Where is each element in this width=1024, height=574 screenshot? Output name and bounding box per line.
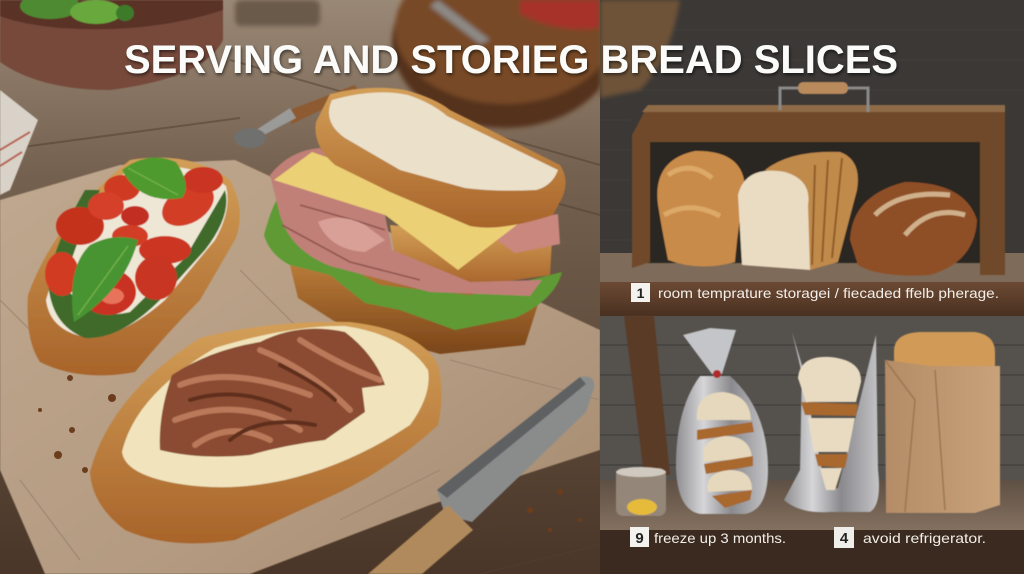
spoon xyxy=(234,85,358,148)
cheese xyxy=(274,152,518,270)
melted cheese xyxy=(122,326,429,487)
left side xyxy=(632,135,650,268)
salad bowl xyxy=(0,0,223,90)
bread crust xyxy=(90,322,442,543)
bottom slice xyxy=(290,265,540,354)
number badge 4: 4 xyxy=(840,530,849,547)
cucumber xyxy=(48,190,226,338)
sliced loaf xyxy=(765,152,858,270)
ham right xyxy=(480,214,560,253)
bread box xyxy=(632,82,1005,276)
cutting board xyxy=(235,0,618,128)
blade xyxy=(437,376,594,522)
brick wall xyxy=(600,0,1024,574)
storage tip 1 xyxy=(631,283,999,302)
top slice crust xyxy=(315,88,566,228)
lid handle xyxy=(780,88,868,112)
ham left xyxy=(270,148,542,296)
crumbs xyxy=(38,375,582,532)
tomato basil bread xyxy=(28,158,240,375)
round-top loaf xyxy=(657,151,745,267)
napkin xyxy=(0,90,38,195)
panel: storage scene xyxy=(600,0,1024,574)
shelf front xyxy=(600,282,1024,316)
bread slices xyxy=(798,357,861,402)
number badge 9 xyxy=(630,527,649,547)
shelf front xyxy=(600,530,1024,574)
loaf xyxy=(894,332,995,368)
pulled pork xyxy=(160,329,385,457)
white spread xyxy=(46,166,228,338)
panel: serving scene xyxy=(0,0,618,574)
lid xyxy=(632,105,1005,142)
bread slices xyxy=(697,392,751,420)
rustic boule xyxy=(850,182,977,276)
parchment paper xyxy=(0,160,600,574)
kraft bag xyxy=(885,360,1000,513)
bag top xyxy=(683,328,736,374)
top left board edge xyxy=(600,0,680,98)
storage tip 4 xyxy=(834,527,986,548)
lettuce xyxy=(264,195,562,330)
wooden table xyxy=(0,0,600,574)
handle xyxy=(368,505,473,574)
top slice crumb xyxy=(329,92,558,191)
tip text: freeze up 3 months. xyxy=(654,530,786,546)
title: SERVING AND STORIEG BREAD SLICES xyxy=(124,38,898,82)
foil wrap xyxy=(784,332,879,512)
bread knife xyxy=(368,376,594,574)
pulled pork bread xyxy=(90,322,442,543)
lower brick wall xyxy=(600,316,1024,486)
shelf post xyxy=(624,316,670,475)
bag body xyxy=(676,376,768,514)
small butter jar xyxy=(616,467,666,516)
shelf top xyxy=(600,480,1024,530)
ham and cheese sandwich xyxy=(264,88,566,354)
number badge 9: 9 xyxy=(635,530,644,547)
lower shelf xyxy=(600,480,1024,574)
tomatoes xyxy=(45,167,223,315)
number badge 4 xyxy=(834,527,854,548)
shelf top xyxy=(600,253,1024,285)
storage tip 3 xyxy=(630,527,786,547)
basil leaves xyxy=(122,158,186,199)
paper bag with loaf xyxy=(885,332,1000,513)
foil wrapped slices xyxy=(784,332,879,512)
foil tied bag xyxy=(676,328,768,514)
number badge 1 xyxy=(631,283,650,302)
tip text: room temprature storagei / fiecaded ffelb pherage. xyxy=(658,285,999,301)
upper shelf xyxy=(600,253,1024,316)
middle slice xyxy=(390,225,552,286)
box interior xyxy=(640,135,990,263)
bread crust xyxy=(28,158,240,375)
right side xyxy=(980,140,1005,275)
tip text: avoid refrigerator. xyxy=(863,530,986,546)
number badge 1: 1 xyxy=(637,285,645,301)
